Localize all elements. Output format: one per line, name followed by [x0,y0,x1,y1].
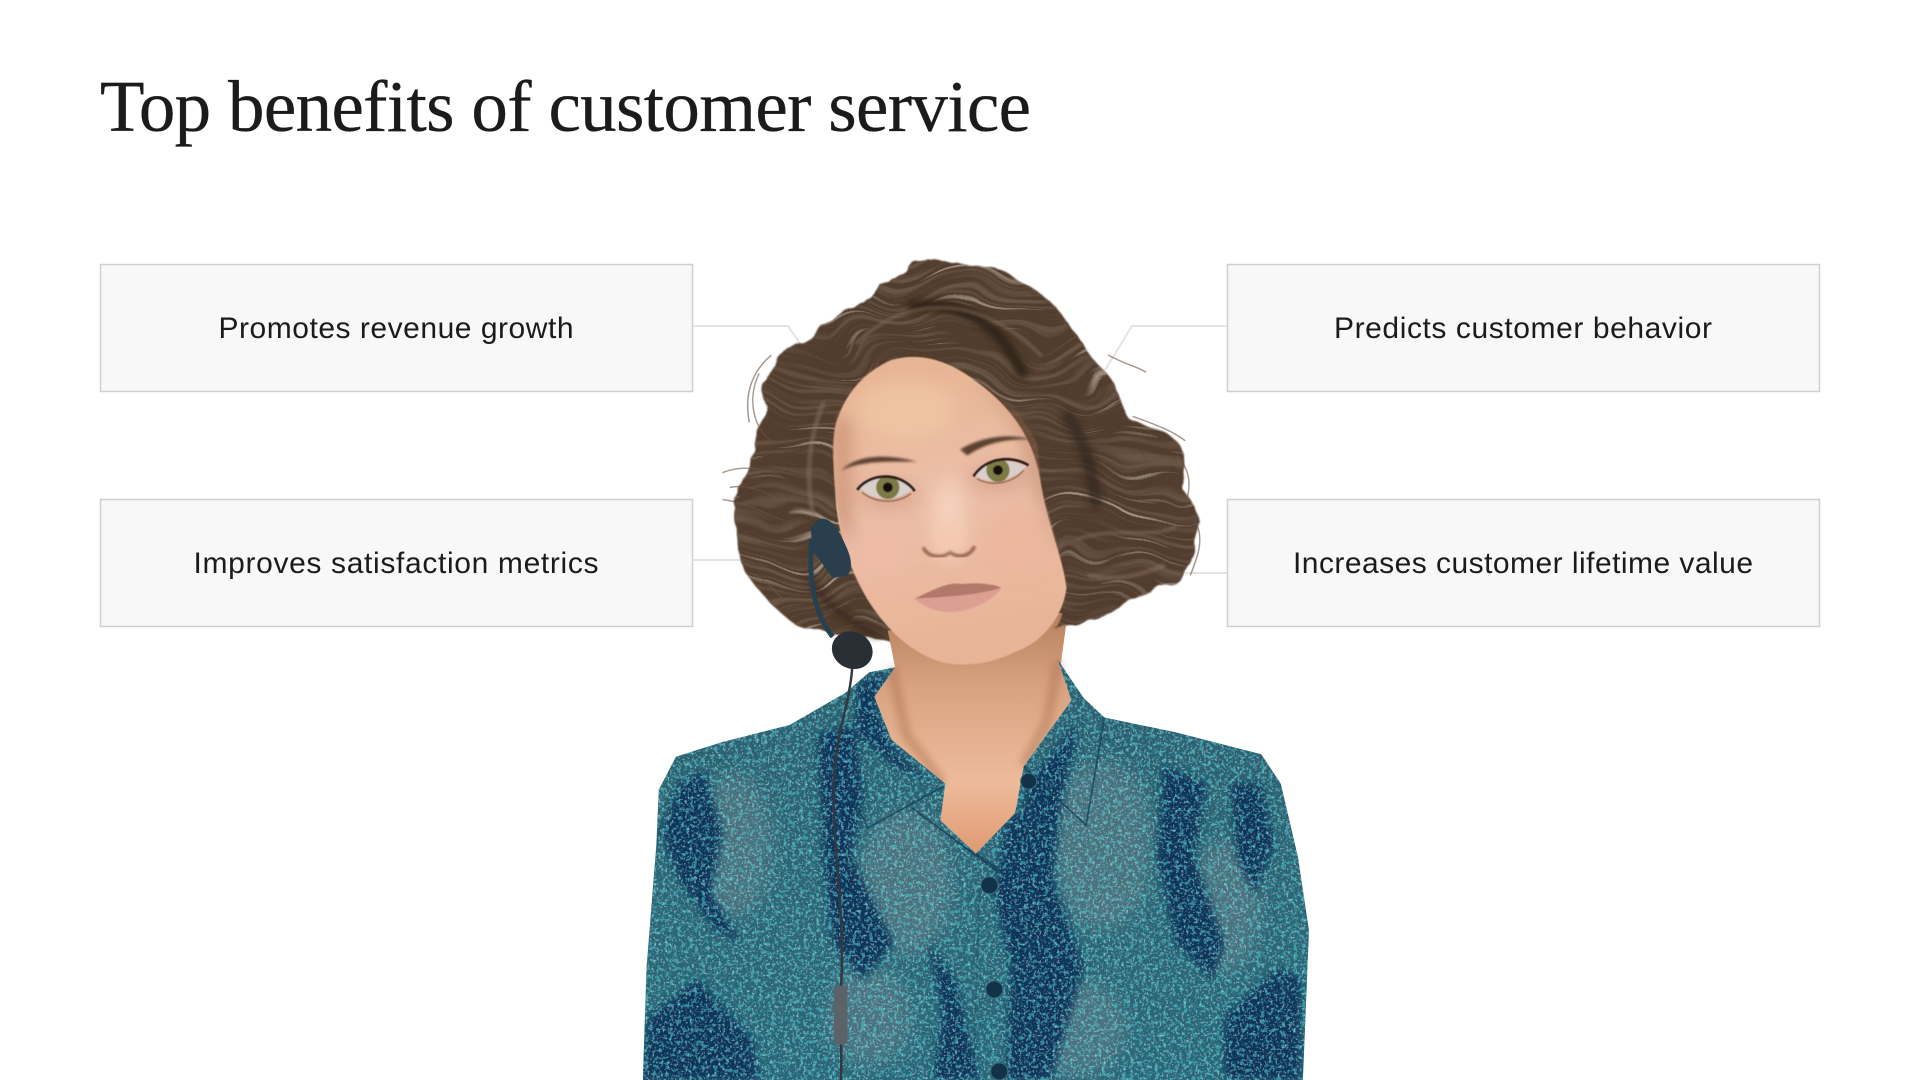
neck [874,612,1071,853]
shirt speckle texture [637,655,1316,1080]
shirt navy bands [643,671,1300,1080]
eyebrows [841,436,1033,470]
shirt gray pattern zones [698,759,1261,1078]
panel: revenue growth: Promotes revenue growth [218,312,574,345]
hair shadows and highlights [808,305,1176,634]
left eye [857,476,915,501]
connector: customer behavior [1105,326,1227,370]
hair front [787,270,1169,631]
panel: satisfaction metrics [100,500,692,626]
panel: customer behavior: Predicts customer behavior [1334,312,1712,345]
headset microphone [826,625,879,676]
panel: revenue growth [100,264,692,392]
nose [923,523,975,556]
neck shadow [891,661,1058,784]
connector: lifetime value [1180,572,1227,574]
title: Top benefits of customer service [100,66,1031,147]
headset cable [834,667,852,1080]
headset boom [811,539,833,637]
face [833,357,1067,665]
headset inline control [834,986,847,1044]
shirt buttons [981,773,1037,1080]
shirt [637,655,1316,1080]
panel: satisfaction metrics: Improves satisfaction metrics [194,547,598,580]
headset [811,519,879,1080]
right eye [973,459,1029,483]
shirt collar outlines and placket [845,718,1104,1080]
connector: revenue growth [693,326,801,345]
wispy strands [722,355,1200,600]
lips [915,583,1002,612]
connector: satisfaction metrics [693,559,770,561]
panel: customer behavior [1228,264,1820,392]
panel: lifetime value: Increases customer lifetime value [1293,547,1753,580]
panel: lifetime value [1228,500,1820,626]
hair back [722,262,1200,643]
photo: customer service agent with headset [637,262,1316,1080]
face shading [833,367,1065,578]
headset earpiece [811,519,851,578]
